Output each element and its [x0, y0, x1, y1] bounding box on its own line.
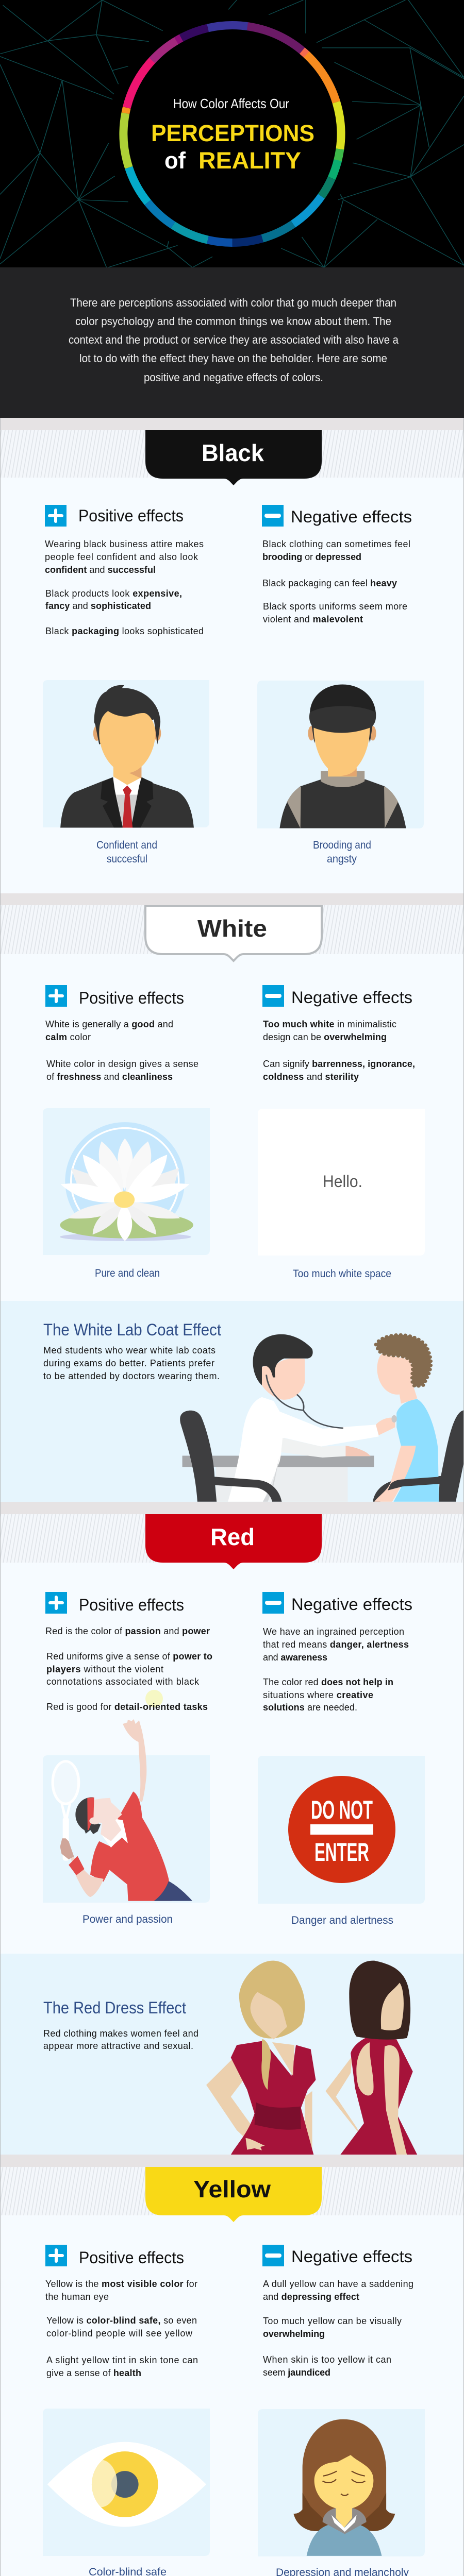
body text	[43, 1345, 220, 1381]
panel: confident man	[43, 680, 209, 827]
positive effects text: Black packaging looks sophisticated	[45, 626, 204, 636]
positive effects text: of freshness and cleanliness	[46, 1072, 173, 1082]
illustration: capped figure	[279, 684, 406, 828]
intro text	[69, 296, 399, 384]
body text	[43, 2028, 198, 2051]
negative effects text: that red means danger, alertness	[263, 1639, 409, 1650]
heading tab: Black: Black	[202, 439, 264, 466]
negative effects text: and depressing effect	[263, 2292, 359, 2302]
panel: brooding figure	[257, 681, 424, 828]
negative effects text: Black packaging can feel heavy	[262, 578, 397, 588]
icon: plus	[45, 985, 67, 1007]
positive effects text: A slight yellow tint in skin tone can	[46, 2355, 198, 2365]
positive effects text: White is generally a good and	[45, 1019, 173, 1029]
negative effects text: brooding or depressed	[262, 552, 361, 562]
heading: positive effects: Positive effects	[79, 989, 184, 1007]
positive effects text: Red is good for detail-oriented tasks	[46, 1702, 208, 1712]
icon: plus	[45, 2245, 67, 2266]
positive effects text: people feel confident and also look	[45, 552, 198, 562]
positive effects text: Black products look expensive,	[45, 588, 182, 599]
heading tab: White: White	[197, 915, 267, 942]
negative effects text: Black clothing can sometimes feel	[262, 539, 410, 549]
body text: during exams do better. Patients prefer	[43, 1358, 214, 1368]
panel: too much white space: Hello.	[323, 1172, 362, 1191]
positive effects text: the human eye	[45, 2292, 109, 2302]
negative effects text: Too much white in minimalistic	[263, 1019, 396, 1029]
heading tab: White	[145, 906, 322, 961]
icon: do not enter	[288, 1776, 395, 1883]
section: White	[0, 893, 464, 1280]
icon: minus	[262, 1592, 284, 1614]
heading: positive effects: Positive effects	[79, 1596, 184, 1614]
caption: brooding: angsty	[327, 853, 357, 865]
caption: brooding: Brooding and	[313, 839, 371, 851]
panel: eye	[43, 2409, 210, 2556]
heading: The White Lab Coat Effect	[43, 1320, 221, 1339]
panel: red dress effect	[0, 1954, 464, 2155]
title: PERCEPTIONS	[151, 120, 314, 146]
heading: negative effects: Negative effects	[291, 1595, 412, 1614]
caption: confident: succesful	[107, 853, 147, 865]
intro text: positive and negative effects of colors.	[144, 371, 323, 384]
positive effects text: color-blind people will see yellow	[46, 2328, 193, 2338]
icon: tennis ball	[145, 1690, 163, 1707]
heading: negative effects: Negative effects	[291, 988, 412, 1007]
negative effects text: situations where creative	[263, 1690, 373, 1700]
title	[151, 96, 314, 174]
heading tab: Yellow: Yellow	[193, 2176, 271, 2202]
heading: negative effects: Negative effects	[291, 2247, 412, 2266]
positive effects text: players without the violent	[46, 1664, 163, 1674]
negative effects text	[262, 539, 410, 624]
intro panel	[0, 267, 464, 418]
positive effects text: fancy and sophisticated	[45, 601, 151, 611]
title: of	[164, 147, 186, 174]
positive effects text	[45, 2279, 198, 2378]
caption: brooding	[313, 839, 371, 865]
positive effects text: give a sense of health	[46, 2368, 141, 2378]
caption: confident	[96, 839, 157, 865]
color wheel ring	[78, 0, 386, 287]
section: Yellow	[0, 2155, 464, 2576]
illustration: businessman	[60, 685, 194, 827]
negative effects text	[263, 2279, 413, 2378]
negative effects text: overwhelming	[263, 2329, 325, 2339]
hero panel	[0, 0, 464, 287]
panel: white lab coat effect	[0, 1301, 464, 1502]
illustration: yellow eye	[47, 2442, 206, 2527]
icon: do not enter: ENTER	[314, 1838, 369, 1867]
caption: power and passion: Power and passion	[82, 1913, 173, 1925]
heading: negative effects: Negative effects	[291, 507, 412, 526]
panel: tennis player	[43, 1719, 210, 1903]
negative effects text: We have an ingrained perception	[263, 1626, 404, 1637]
negative effects text: When skin is too yellow it can	[263, 2354, 391, 2365]
intro text: There are perceptions associated with color that go much deeper than	[70, 296, 396, 309]
positive effects text	[45, 1019, 198, 1082]
panel: do not enter sign	[258, 1756, 425, 1904]
panel: too much white space	[258, 1109, 425, 1256]
body text: to be attended by doctors wearing them.	[43, 1371, 220, 1381]
icon: minus	[262, 985, 284, 1007]
illustration: two women in red dresses	[206, 1961, 417, 2155]
heading tab: Red: Red	[210, 1523, 255, 1550]
intro text: lot to do with the effect they have on the beholder. Here are some	[79, 352, 387, 365]
illustration: lotus flower	[60, 1122, 193, 1241]
heading tab: Black	[145, 430, 322, 485]
icon: do not enter: DO NOT	[311, 1795, 373, 1824]
body text: Red clothing makes women feel and	[43, 2028, 198, 2039]
negative effects text: seem jaundiced	[263, 2367, 330, 2378]
negative effects text: Black sports uniforms seem more	[263, 601, 407, 612]
illustration: doctor and patient	[180, 1334, 464, 1502]
negative effects text	[263, 1626, 409, 1713]
icon: minus	[262, 2245, 284, 2266]
negative effects text: and awareness	[263, 1652, 327, 1663]
positive effects text: Red uniforms give a sense of power to	[46, 1651, 212, 1662]
body text: Med students who wear white lab coats	[43, 1345, 216, 1355]
positive effects text: calm color	[45, 1032, 91, 1042]
heading: positive effects: Positive effects	[79, 2248, 184, 2267]
positive effects text: White color in design gives a sense	[46, 1059, 198, 1069]
caption: danger and alertness: Danger and alertness	[291, 1914, 393, 1926]
panel: pure lotus	[43, 1108, 210, 1255]
negative effects text: The color red does not help in	[263, 1677, 393, 1687]
icon: plus	[45, 1592, 67, 1614]
positive effects text: confident and successful	[45, 565, 156, 575]
icon: plus	[45, 505, 67, 527]
positive effects text: connotations associated with black	[46, 1676, 200, 1687]
heading tab: Yellow	[145, 2167, 322, 2222]
intro text: context and the product or service they are associated with also have a	[69, 333, 399, 346]
positive effects text	[45, 539, 204, 636]
negative effects text: coldness and sterility	[263, 1072, 359, 1082]
negative effects text: Can signify barrenness, ignorance,	[263, 1059, 415, 1069]
title: REALITY	[198, 147, 301, 174]
geometric network lines	[0, 0, 464, 267]
negative effects text: A dull yellow can have a saddening	[263, 2279, 413, 2289]
panel: sad girl	[258, 2409, 425, 2556]
heading: The Red Dress Effect	[43, 1998, 186, 2017]
positive effects text: Red is the color of passion and power	[45, 1626, 210, 1636]
title: How Color Affects Our	[173, 96, 289, 111]
caption: pure and clean: Pure and clean	[95, 1267, 160, 1279]
positive effects text: Yellow is the most visible color for	[45, 2279, 197, 2289]
section: Black	[0, 418, 464, 865]
negative effects text: Too much yellow can be visually	[263, 2316, 402, 2326]
illustration: sad girl	[293, 2419, 395, 2556]
intro text: color psychology and the common things we know about them. The	[75, 315, 391, 328]
positive effects text: Yellow is color-blind safe, so even	[46, 2315, 197, 2326]
negative effects text: solutions are needed.	[263, 1702, 357, 1713]
icon: minus	[262, 505, 284, 527]
positive effects text: Wearing black business attire makes	[45, 539, 204, 549]
heading: positive effects: Positive effects	[78, 506, 184, 525]
section: Red	[0, 1502, 464, 1926]
body text: appear more attractive and sexual.	[43, 2041, 193, 2051]
negative effects text: violent and malevolent	[263, 614, 363, 624]
caption: confident: Confident and	[96, 839, 157, 851]
heading tab: Red	[145, 1514, 322, 1569]
caption: too much white space: Too much white space	[293, 1268, 391, 1280]
illustration: tennis player	[53, 1719, 192, 1901]
negative effects text: design can be overwhelming	[263, 1032, 387, 1042]
negative effects text	[263, 1019, 415, 1082]
positive effects text	[45, 1626, 212, 1712]
